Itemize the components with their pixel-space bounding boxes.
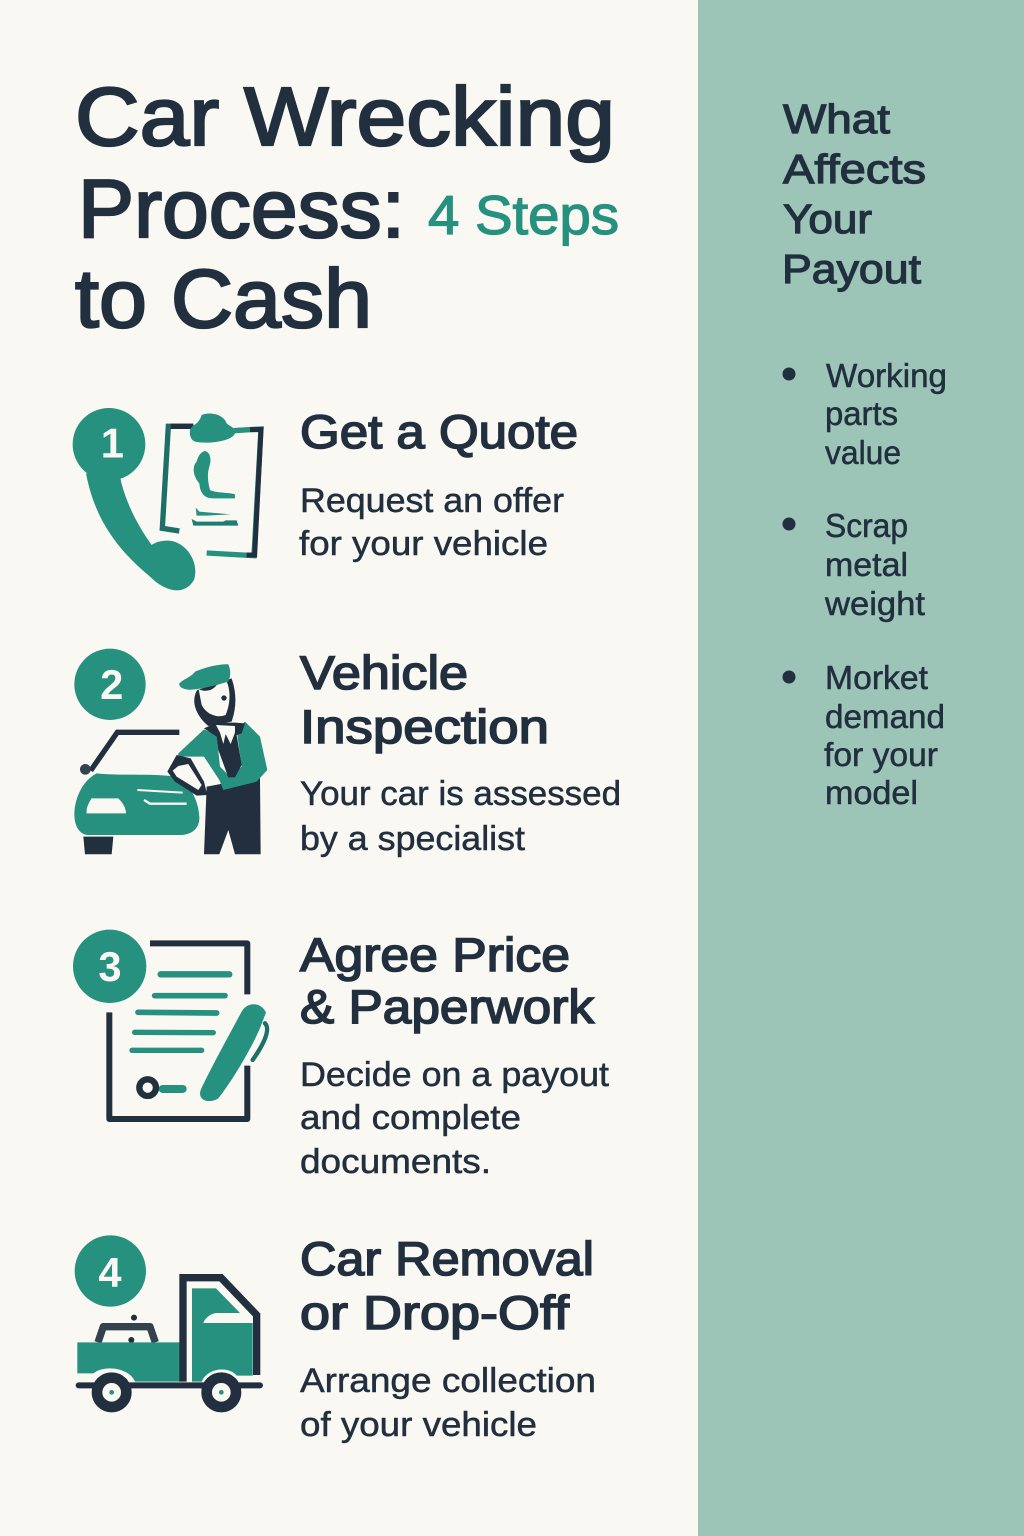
bullet: market demand for your model: for your [824, 736, 938, 773]
icon: contract and pen with number 3: 3 [98, 943, 122, 990]
bullet: scrap metal weight: metal [825, 546, 908, 583]
icon: phone and clipboard with number 1: 1 [101, 420, 124, 467]
heading: car removal or drop-off: Car Removal [300, 1232, 594, 1285]
description: step 3: Decide on a payout [300, 1056, 610, 1094]
bullet: scrap metal weight: weight [824, 585, 925, 622]
heading: get a quote: Get a Quote [300, 405, 578, 458]
description: step 2: Your car is assessed [300, 775, 621, 813]
sidebar heading: Payout [782, 246, 922, 292]
bullet: market demand for your model: model [825, 774, 918, 811]
sidebar heading: What [783, 96, 891, 142]
bullet: scrap metal weight [782, 507, 925, 622]
icon: inspector and car with number 2 [74, 649, 267, 854]
title: 4 Steps [428, 184, 619, 246]
icon: tow truck with number 4: 4 [98, 1249, 122, 1296]
bullet: market demand for your model: Morket [825, 659, 928, 696]
heading: car removal or drop-off [300, 1232, 594, 1339]
description: step 1: Request an offer [300, 482, 564, 520]
icon: inspector and car with number 2: 2 [100, 661, 123, 708]
bullet: market demand for your model: demand [825, 698, 945, 735]
title: Process: [78, 162, 405, 255]
heading: vehicle inspection: Inspection [300, 700, 549, 753]
step 1 [73, 405, 578, 590]
step 2 [74, 646, 621, 858]
title [75, 70, 619, 345]
description: step 4: of your vehicle [300, 1406, 537, 1444]
description: step 3: and complete [300, 1099, 521, 1137]
sidebar heading: Your [783, 196, 872, 242]
bullet: market demand for your model [782, 659, 945, 811]
title: Car Wrecking [75, 70, 615, 163]
bullet: working parts value: value [825, 434, 901, 471]
step 3 [73, 928, 610, 1181]
heading: agree price and paperwork: Agree Price [300, 928, 570, 981]
description: step 2: by a specialist [300, 820, 526, 858]
heading: car removal or drop-off: or Drop-Off [300, 1286, 570, 1339]
step 4 [75, 1232, 596, 1444]
sidebar heading [782, 96, 926, 292]
description: step 3 [300, 1056, 610, 1181]
description: step 3: documents. [300, 1143, 491, 1181]
icon: tow truck with number 4 [75, 1235, 260, 1407]
icon: phone and clipboard with number 1 [73, 408, 261, 590]
panel: what affects your payout [698, 0, 1024, 1536]
icon: contract and pen with number 3 [73, 930, 267, 1119]
description: step 1 [299, 482, 564, 563]
description: step 4 [300, 1362, 596, 1444]
heading: agree price and paperwork: & Paperwork [300, 980, 595, 1033]
bullet: scrap metal weight: Scrap [825, 507, 908, 544]
bullet: working parts value: Working [826, 357, 947, 394]
title: to Cash [75, 252, 372, 345]
heading: agree price and paperwork [300, 928, 595, 1033]
sidebar heading: Affects [783, 146, 926, 192]
bullet: working parts value [782, 357, 947, 471]
description: step 2 [300, 775, 621, 858]
description: step 4: Arrange collection [300, 1362, 596, 1400]
description: step 1: for your vehicle [299, 525, 548, 563]
heading: vehicle inspection [300, 646, 549, 753]
bullet: working parts value: parts [825, 395, 898, 432]
heading: vehicle inspection: Vehicle [300, 646, 468, 699]
